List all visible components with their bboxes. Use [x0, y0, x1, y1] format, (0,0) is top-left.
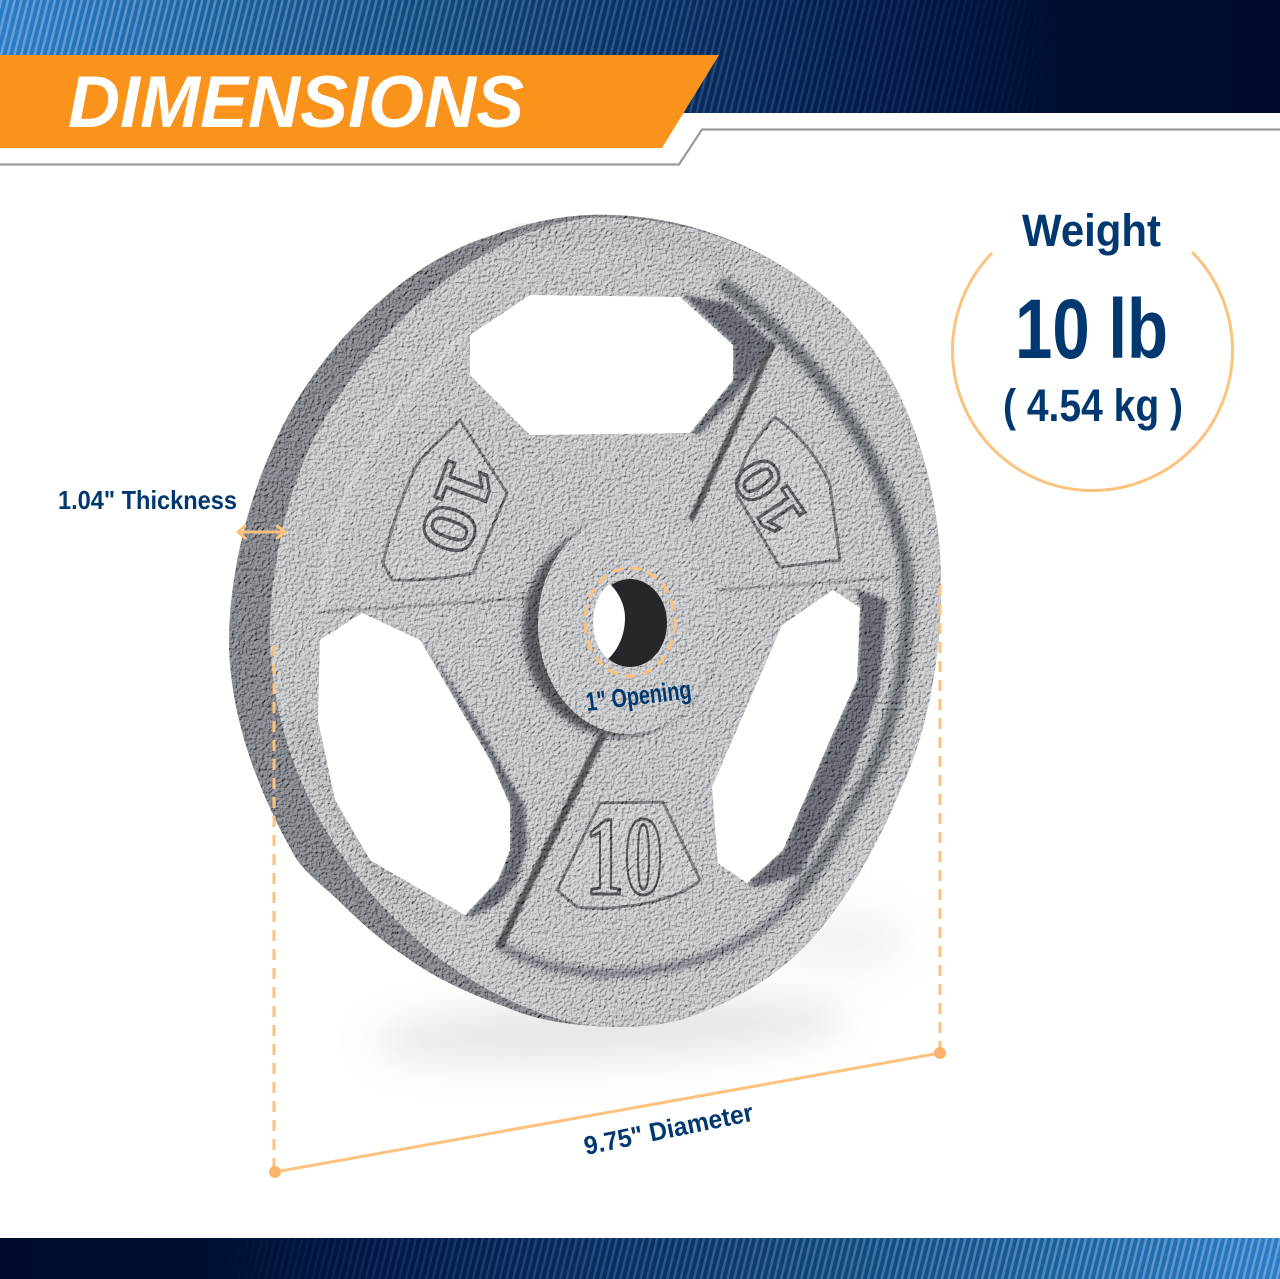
badge: bottom 10: 10 — [585, 795, 663, 919]
title banner — [0, 55, 719, 148]
thickness label: 1.04" Thickness — [58, 485, 237, 515]
window inner walls — [420, 293, 888, 918]
plate body — [229, 215, 941, 1027]
weight value lb: 10 lb — [1015, 282, 1168, 376]
diameter dimension line — [269, 585, 946, 1178]
weight ring — [952, 252, 1232, 490]
diameter label: 9.75" Diameter — [581, 1097, 756, 1161]
badge: left 10: 10 — [403, 450, 510, 564]
top window — [470, 295, 733, 435]
weight value kg: ( 4.54 kg ) — [1003, 380, 1183, 431]
texture — [220, 205, 950, 1035]
footer band — [0, 1238, 1280, 1279]
center hole — [593, 579, 667, 667]
ground shadow — [369, 910, 910, 1073]
rim shading — [300, 232, 908, 973]
lower left window — [318, 613, 510, 915]
badge: right 10: 10 — [719, 445, 819, 546]
plate front face — [270, 218, 941, 1027]
header band — [0, 0, 1280, 113]
opening dashed circle — [585, 568, 675, 676]
badge: left 10 — [383, 420, 510, 580]
title text: DIMENSIONS — [68, 62, 524, 143]
weight plate — [220, 205, 950, 1035]
lower right window — [712, 590, 860, 883]
header outline strokes — [0, 130, 1280, 164]
thickness arrow — [238, 526, 285, 538]
weight heading: Weight — [1022, 205, 1161, 256]
badge: right 10 — [719, 417, 840, 567]
opening label: 1" Opening — [584, 674, 693, 717]
weight callout — [952, 205, 1232, 490]
spoke grooves — [320, 345, 888, 945]
hub — [522, 514, 718, 738]
